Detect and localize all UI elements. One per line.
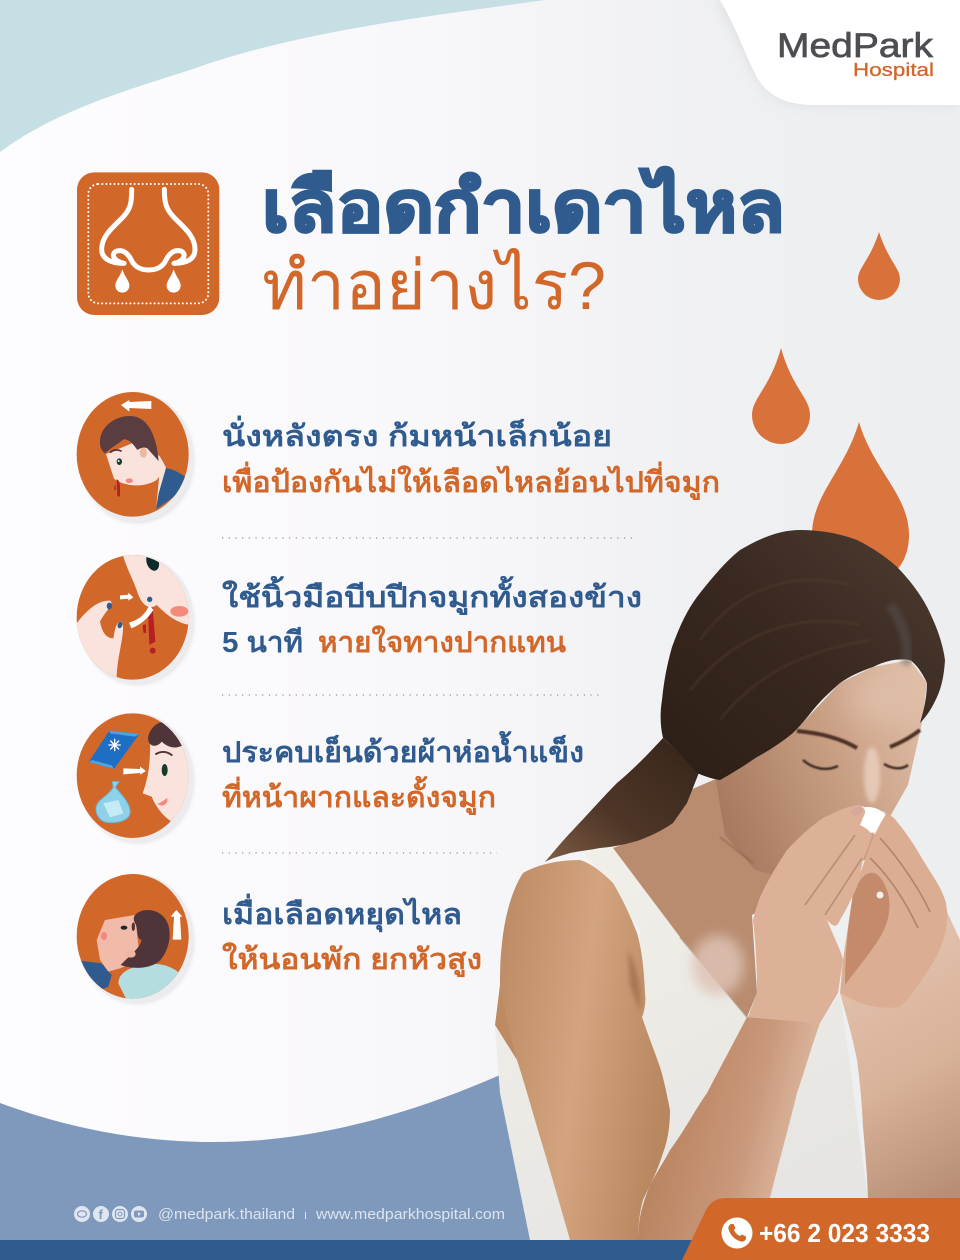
photo: woman blowing nose <box>495 530 960 1240</box>
back skin sliver <box>495 985 517 1060</box>
step 1 text: นั่งหลังตรง ก้มหน้าเล็กน้อย <box>222 415 612 453</box>
title line 1: เลือดกำเดาไหล <box>262 166 785 246</box>
logo subtitle: Hospital <box>853 60 934 80</box>
icon: nose badge <box>77 172 219 315</box>
social handle: @medpark.thailand <box>158 1206 295 1223</box>
closed eyes <box>803 760 838 769</box>
website: www.medparkhospital.com <box>315 1206 505 1223</box>
footer social and web links <box>74 1206 505 1223</box>
upper arm <box>500 860 670 1240</box>
social icons <box>74 1206 147 1222</box>
title line 2: ทำอย่างไร? <box>262 247 606 324</box>
phone panel <box>682 1198 960 1260</box>
face <box>715 660 927 882</box>
step 2 text <box>222 575 642 659</box>
forearm right <box>840 903 960 1240</box>
step 2 text: ใช้นิ้วมือบีบปีกจมูกทั้งสองข้าง <box>222 575 642 615</box>
hair ponytail <box>545 738 700 862</box>
step 3 text: ประคบเย็นด้วยผ้าห่อน้ำแข็ง <box>222 730 584 769</box>
step 4 text: ให้นอนพัก ยกหัวสูง <box>222 942 482 977</box>
step 3 text <box>222 730 584 815</box>
step 4 text: เมื่อเลือดหยุดไหล <box>222 893 462 932</box>
icon: phone <box>722 1218 752 1248</box>
hair <box>661 530 945 780</box>
bottom blue wave <box>0 1075 700 1260</box>
neck and chest <box>613 775 810 1017</box>
tank top <box>495 848 868 1240</box>
logo wordmark: MedPark <box>777 27 934 65</box>
navy footer bar <box>0 1240 720 1260</box>
icon circle 1: head tilted forward <box>77 392 193 523</box>
forearm left <box>638 1017 820 1240</box>
step 2 text: หายใจทางปากแทน <box>318 625 566 659</box>
step 1 text <box>222 415 720 500</box>
brows <box>797 731 857 748</box>
phone number: +66 2 023 3333 <box>759 1218 930 1248</box>
teal corner wave <box>0 0 545 152</box>
step 1 text: เพื่อป้องกันไม่ให้เลือดไหลย้อนไปที่จมูก <box>222 461 720 500</box>
right hand <box>840 813 947 1008</box>
step 2 text: 5 นาที <box>222 627 303 659</box>
step 3 text: ที่หน้าผากและดั้งจมูก <box>222 775 496 815</box>
decorative drops <box>752 232 909 585</box>
icon circle 3: cold compress <box>77 713 193 843</box>
footer social and web links: f <box>98 1207 104 1222</box>
logo tab <box>716 0 960 105</box>
icon circle 4: resting with head raised <box>73 874 193 1003</box>
tissue <box>788 805 896 855</box>
icon circle 2: pinching nose <box>73 551 193 684</box>
left hand <box>748 805 872 1023</box>
step 4 text <box>222 893 482 977</box>
